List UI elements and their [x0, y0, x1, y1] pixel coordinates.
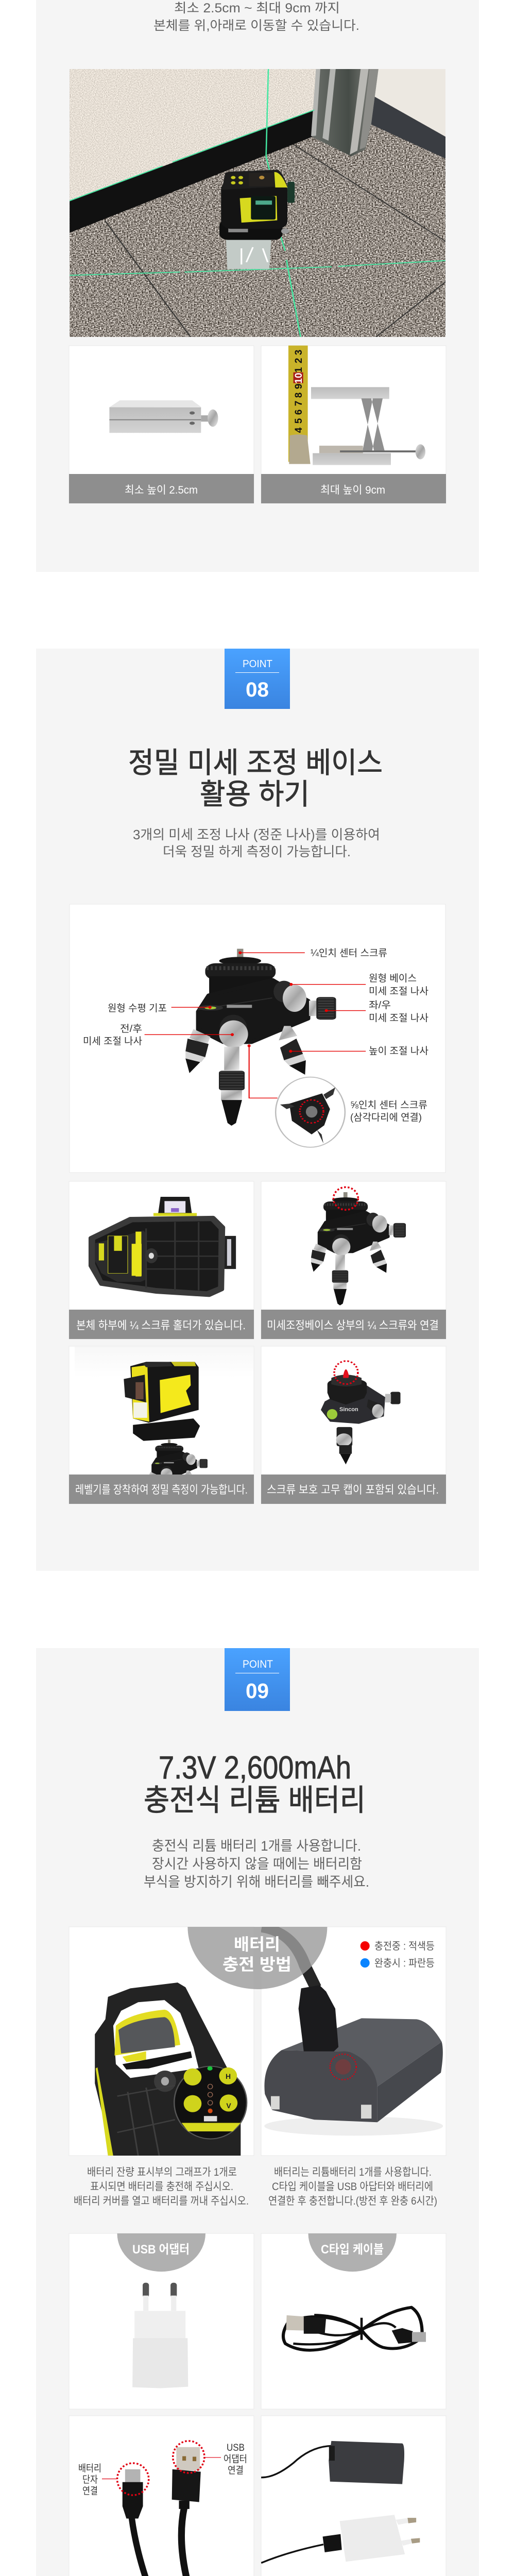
label: USB 어댑터	[132, 2243, 190, 2257]
illustration: open battery cover with indicator inset	[95, 1982, 247, 2158]
text: description	[144, 1838, 369, 1890]
card: maximum height	[261, 346, 446, 503]
captions: battery instructions: 배터리 커버를 열고 배터리를 꺼내 주십시오.	[74, 2195, 249, 2207]
text: description: 장시간 사용하지 않을 때에는 배터리함	[152, 1856, 362, 1872]
labels: ⅝인치 센터 스크류	[350, 1099, 427, 1111]
card: battery with cable	[261, 1927, 446, 2156]
illustration: base with red cap	[321, 1361, 401, 1464]
marker: dotted highlight	[333, 1187, 358, 1210]
illustration: USB A and C connectors	[102, 2441, 221, 2576]
text: height range description	[153, 1, 359, 33]
callout lines	[145, 951, 366, 1098]
label dome	[117, 2233, 205, 2272]
badge: point 08: POINT	[243, 658, 272, 670]
heading: 정밀 미세 조정 베이스	[128, 747, 383, 779]
illustration: folded aluminium lift	[109, 400, 218, 433]
labels: 미세 조절 나사	[83, 1036, 142, 1047]
illustration: battery pack and C-type plug	[262, 1927, 443, 2136]
label dome	[308, 2233, 397, 2272]
labels	[78, 2443, 247, 2497]
illustration: tape measure and raised lift	[288, 346, 425, 465]
illustration: coiled cable	[283, 2308, 426, 2350]
captions: battery instructions: 표시되면 배터리를 충전해 주십시오.	[90, 2181, 233, 2193]
photo: laser level on granite floor	[70, 69, 445, 337]
text: height range description: 본체를 위,아래로 이동할 수 있습니다.	[153, 19, 359, 33]
card: protective rubber cap	[261, 1346, 446, 1504]
text: description: 충전식 리튬 배터리 1개를 사용합니다.	[152, 1838, 361, 1854]
card: connected charger set	[261, 2416, 446, 2576]
caption: 최소 높이 2.5cm	[125, 484, 198, 496]
text: description: 3개의 미세 조정 나사 (정준 나사)를 이용하여	[133, 827, 380, 842]
panel: point 09	[36, 1648, 479, 2576]
badge: point 08: 08	[246, 679, 269, 701]
badge: point 09	[225, 1648, 290, 1711]
label: C타입 케이블	[321, 2243, 384, 2257]
labels: 미세 조절 나사	[369, 986, 428, 997]
captions: battery instructions: C타입 케이블을 USB 아답터와 배터리에	[272, 2181, 433, 2193]
badge: battery charging method: 배터리	[234, 1935, 280, 1954]
caption: 최대 높이 9cm	[320, 484, 385, 496]
caption: 레벨기를 장착하여 정밀 측정이 가능합니다.	[75, 1483, 248, 1496]
illustration: open battery cover with indicator inset: V	[226, 2102, 231, 2110]
badge: point 09: POINT	[243, 1658, 273, 1670]
labels: 전/후	[120, 1023, 142, 1035]
labels: 원형 베이스	[369, 973, 417, 984]
legend: 충전중 : 적색등	[374, 1940, 435, 1952]
legend: 완충시 : 파란등	[374, 1957, 435, 1969]
labels: 어댑터	[224, 2453, 247, 2465]
text: height range description: 최소 2.5cm ~ 최대 9cm 까지	[174, 1, 340, 15]
heading: 충전식 리튬 배터리	[144, 1784, 366, 1817]
card: battery compartment	[69, 1927, 254, 2158]
card: C type cable	[261, 2233, 446, 2409]
labels: 배터리	[78, 2463, 101, 2474]
card: usb adapter	[69, 2233, 254, 2409]
illustration: tape measure and raised lift: 7	[294, 401, 304, 406]
text: description	[133, 827, 380, 859]
card: level mounted on base	[69, 1346, 254, 1511]
badge: battery charging method: 충전 방법	[222, 1955, 291, 1974]
brand text on base: Sincon	[339, 1406, 358, 1413]
panel: base height section	[36, 0, 479, 572]
illustration: tape measure and raised lift: 2	[294, 358, 304, 363]
illustration: tripod with highlighted screw	[311, 1192, 406, 1306]
text: description: 부식을 방지하기 위해 배터리를 빼주세요.	[144, 1874, 369, 1890]
labels: ¼인치 센터 스크류	[311, 947, 387, 959]
heading: 활용 하기	[200, 778, 310, 810]
caption: 미세조정베이스 상부의 ¼ 스크류와 연결	[267, 1319, 439, 1332]
illustration: tripod base	[185, 949, 336, 1126]
badge: battery charging method	[187, 1927, 327, 1989]
illustration: level on tripod	[75, 1347, 253, 1511]
captions: battery instructions	[74, 2166, 437, 2207]
caption: 본체 하부에 ¼ 스크류 홀더가 있습니다.	[76, 1319, 246, 1332]
captions: battery instructions: 배터리는 리튬배터리 1개를 사용합니다.	[274, 2166, 432, 2178]
heading: 7.3V 2,600mAh	[159, 1750, 351, 1786]
labels: 연결	[82, 2485, 98, 2497]
illustration: tape measure and raised lift: 5	[294, 418, 304, 423]
captions: battery instructions: 연결한 후 충전합니다.(방전 후 완충 6시간)	[268, 2195, 437, 2207]
labels: USB	[227, 2443, 245, 2453]
legend	[360, 1940, 435, 1969]
labels: 좌/우	[369, 999, 391, 1011]
panel: point 08	[36, 649, 479, 1571]
illustration: tape measure and raised lift: 9	[294, 384, 304, 389]
caption: 스크류 보호 고무 캡이 포함되 있습니다.	[267, 1483, 439, 1496]
illustration: tape measure and raised lift: 1	[294, 367, 304, 372]
illustration: tape measure and raised lift: 8	[294, 393, 304, 398]
illustration: battery, cable and adapter	[261, 2441, 420, 2563]
card: body underside	[69, 1181, 254, 1339]
badge: point 09: 09	[246, 1679, 269, 1703]
panel: base diagram	[70, 904, 445, 1173]
labels: 미세 조절 나사	[369, 1012, 428, 1024]
badge: point 08	[225, 649, 290, 709]
heading	[144, 1750, 366, 1817]
labels: 단자	[82, 2474, 98, 2485]
labels	[83, 947, 428, 1123]
labels: 연결	[228, 2465, 244, 2476]
heading	[128, 747, 383, 810]
labels: 원형 수평 기포	[108, 1003, 167, 1014]
illustration: tape measure and raised lift: 6	[294, 410, 304, 415]
card: connector closeup	[69, 2416, 254, 2576]
illustration: tape measure and raised lift: 10	[294, 372, 304, 384]
labels: (삼각다리에 연결)	[350, 1112, 422, 1123]
illustration: level underside	[91, 1197, 236, 1295]
labels: 높이 조절 나사	[369, 1045, 428, 1057]
illustration: tape measure and raised lift: 3	[294, 350, 304, 355]
illustration: open battery cover with indicator inset: H	[226, 2072, 231, 2080]
captions: battery instructions: 배터리 잔량 표시부의 그래프가 1개로	[87, 2166, 237, 2178]
inset: underside of base	[276, 1077, 345, 1147]
text: description: 더욱 정밀 하게 측정이 가능합니다.	[163, 844, 351, 859]
illustration: white adapter	[132, 2283, 188, 2388]
card: connect to base top	[261, 1181, 446, 1339]
illustration: tape measure and raised lift: 4	[294, 427, 304, 433]
card: minimum height	[69, 346, 254, 503]
